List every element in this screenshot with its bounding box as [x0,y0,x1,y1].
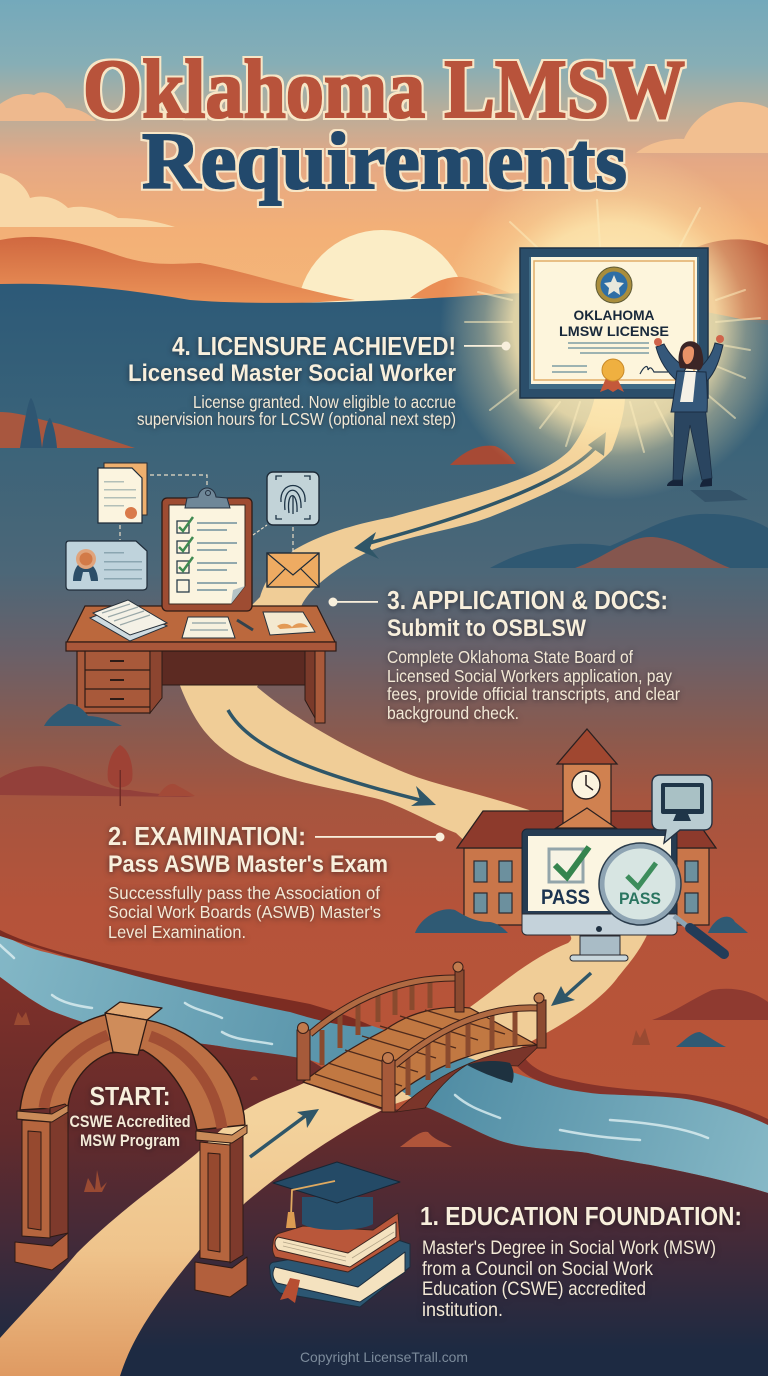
step 2 connector [315,832,444,842]
document: ID card [66,541,147,590]
step 2 label: Pass ASWB Master's Exam [108,851,388,878]
computer monitor with pass [522,829,677,961]
step 1 label: Education (CSWE) accredited [422,1279,646,1300]
distant hills right [490,514,768,568]
mid-left hills and tree [0,745,195,806]
step 3 label: 3. APPLICATION & DOCS: [387,585,668,615]
dark foreground land [0,977,768,1376]
title [83,43,685,206]
step 2 label: Social Work Boards (ASWB) Master's [108,902,381,922]
license certificate [520,248,708,398]
arrow: start of road [250,1109,319,1157]
step 3 label: background check. [387,703,519,723]
start label: START: [90,1081,170,1111]
footbridge [297,962,546,1112]
step 4 label: 4. LICENSURE ACHIEVED! [172,331,456,361]
icon: fingerprint [253,472,319,552]
step 4 label [128,331,456,429]
magnifying glass [599,843,724,954]
winding road [178,396,647,1110]
start label: CSWE Accredited [70,1112,190,1131]
step 1 label: Master's Degree in Social Work (MSW) [422,1238,716,1259]
clipboard checklist [162,488,252,611]
step 3 connector [328,598,378,606]
title line 1: Oklahoma LMSW [83,43,685,136]
start label: MSW Program [80,1131,180,1150]
road over foreground land [0,1083,382,1376]
step 3 label: Licensed Social Workers application, pay [387,666,672,686]
land gradient and blue hills [0,284,768,1376]
step 3 label: fees, provide official transcripts, and clear [387,684,680,704]
arrow: road to bridge [551,973,591,1006]
celebrating person [654,335,748,502]
step 3 label: Submit to OSBLSW [387,615,586,642]
step 1 label [420,1201,742,1321]
setting sun [297,230,467,400]
step 3 label [387,585,680,723]
speech bubble with computer [652,775,712,843]
step 2 label: 2. EXAMINATION: [108,821,306,851]
step 2 label [108,821,388,942]
step 4 label: supervision hours for LCSW (optional next step) [137,409,456,429]
start label [70,1081,190,1150]
copyright: Copyright LicenseTrall.com [300,1349,468,1365]
graduation cap and books [269,1162,410,1307]
bush under desk [44,704,122,726]
stone arch gateway [15,1002,247,1297]
title: Requirements [142,118,627,206]
step 4 label: License granted. Now eligible to accrue [193,392,456,412]
river [0,930,768,1193]
back hills [0,237,768,320]
PASS label: PASS [541,886,590,909]
certificate title: LMSW LICENSE [559,324,669,339]
step 2 label: Level Examination. [108,922,246,942]
small shrubs [14,989,768,1192]
arrow: road to desk section [228,710,436,806]
certificate title: OKLAHOMA [574,308,655,323]
certificate title [559,308,669,339]
step 1 label: institution. [422,1300,503,1321]
step 4 connector [464,342,510,350]
arrow: road 4 double-headed [354,432,606,559]
distant hills and trees left [0,398,516,465]
license glow and rays [440,150,768,500]
step 3 label: Complete Oklahoma State Board of [387,647,633,667]
clouds [0,92,768,227]
step 4 label: Licensed Master Social Worker [128,360,456,387]
papers on desk [90,600,315,641]
step 2 label: Successfully pass the Association of [108,883,380,903]
icon: envelope [267,553,319,587]
PASS in lens: PASS [619,889,661,908]
desk [66,606,336,723]
step 1 label: from a Council on Social Work [422,1259,653,1280]
clock [572,771,600,799]
school building [415,729,748,933]
sky background [0,0,768,320]
document: transcript [98,463,207,540]
